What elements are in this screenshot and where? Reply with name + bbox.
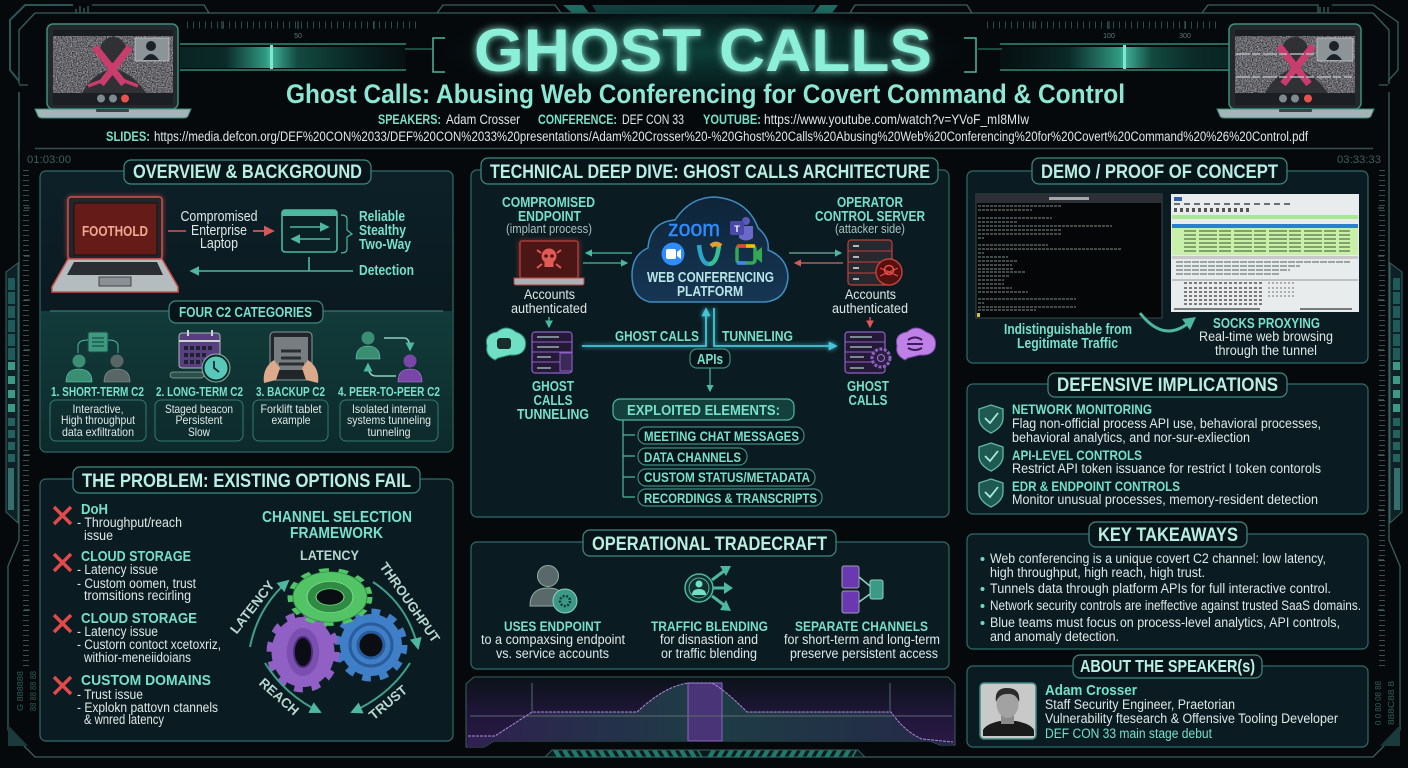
compromised endpoint: Accounts <box>524 287 575 302</box>
item: separate channels: SEPARATE CHANNELS <box>795 618 928 634</box>
talk metadata: CONFERENCE: <box>538 112 617 127</box>
heading: key takeaways: KEY TAKEAWAYS <box>1098 524 1238 546</box>
operator control server <box>815 195 925 327</box>
icon: teams <box>730 217 753 240</box>
category 1: short-term <box>50 332 146 441</box>
title: GHOST CALLS <box>474 17 932 84</box>
compromised endpoint: (implant process) <box>506 222 592 236</box>
heading: defensive implications: DEFENSIVE IMPLICATIONS <box>1057 374 1278 396</box>
category 3: backup: 3. BACKUP C2 <box>256 384 325 399</box>
left tunneling node <box>486 328 589 423</box>
speaker details: Adam Crosser <box>1045 682 1137 699</box>
category 4: peer-to-peer: tunneling <box>368 425 410 439</box>
panel: defensive implications <box>967 373 1368 514</box>
demo captions: through the tunnel <box>1215 343 1317 358</box>
panel: operational tradecraft <box>471 530 949 669</box>
heading: the problem: THE PROBLEM: EXISTING OPTIONS FAIL <box>82 470 411 492</box>
left ruler: 50 <box>294 33 302 40</box>
panel: technical deep dive <box>471 158 949 517</box>
demo captions: Legitimate Traffic <box>1017 336 1118 352</box>
talk metadata: https://www.youtube.com/watch?v=YVoF_mI8MIw <box>764 112 1029 127</box>
ghost calls / tunneling labels: GHOST CALLS <box>615 329 699 345</box>
item: uses endpoint <box>481 566 625 661</box>
option: cloud storage 2: CLOUD STORAGE <box>81 610 197 627</box>
category 2: long-term: Staged beacon <box>165 402 233 416</box>
category 1: short-term: Interactive, <box>72 402 124 416</box>
compromised laptop label and arrows <box>168 209 273 252</box>
tunnel flow arrows <box>582 308 837 391</box>
detection arrow: Detection <box>359 263 414 279</box>
speaker photo <box>980 683 1036 739</box>
left header bar <box>180 44 432 70</box>
right ruler: 100 <box>1103 33 1115 40</box>
item: traffic blending: for disnastion and <box>660 632 758 647</box>
takeaway text: Web conferencing is a unique covert C2 channel: low latency, <box>990 551 1326 566</box>
laptop: right glitched video call <box>1217 24 1374 118</box>
right ghost calls node <box>845 328 936 409</box>
compromised endpoint: ENDPOINT <box>518 209 581 225</box>
option: cloud storage 2: withior-meneiidoians <box>83 650 191 665</box>
left timestamp: 01:03:00 <box>27 154 71 166</box>
talk metadata <box>106 112 1308 144</box>
item: traffic blending: TRAFFIC BLENDING <box>651 618 768 634</box>
right side gauge: 0 0 80 08 88 <box>1374 680 1383 725</box>
right side gauge: 888C88 8 <box>1387 680 1396 725</box>
operator control server: (attacker side) <box>835 222 905 236</box>
heading: channel selection framework: FRAMEWORK <box>290 525 384 542</box>
heading: channel selection framework <box>262 509 412 542</box>
category 2: long-term: Persistent <box>176 413 223 427</box>
takeaway text: Tunnels data through platform APIs for full interactive control. <box>990 581 1331 596</box>
detection arrow <box>191 257 414 279</box>
category 1: short-term: data exfiltration <box>62 425 134 439</box>
option: cloud storage 2: - Custorn contoct xcetoxriz, <box>77 637 221 652</box>
compromised endpoint: COMPROMISED <box>502 195 595 211</box>
speaker details: Staff Security Engineer, Praetorian <box>1045 697 1235 712</box>
item: network monitoring: behavioral analytics, and nor-sur-exliection <box>1012 430 1250 445</box>
item: api-level controls: API-LEVEL CONTROLS <box>1012 447 1142 463</box>
wireshark screenshot <box>1171 194 1359 312</box>
left ruler <box>187 21 420 40</box>
item: separate channels <box>784 566 940 661</box>
icon: meet <box>737 246 762 263</box>
compromised endpoint <box>502 195 595 327</box>
left side gauge <box>6 170 38 746</box>
talk metadata: Adam Crosser <box>446 112 520 127</box>
right header bar <box>978 44 1230 70</box>
icon: two-way window <box>282 210 337 252</box>
traffic chart <box>466 677 955 747</box>
web conferencing platform cloud: WEB CONFERENCING <box>647 270 774 286</box>
item: uses endpoint: USES ENDPOINT <box>504 618 601 634</box>
heading: four c2 categories <box>169 301 323 323</box>
demo captions: Real-time web browsing <box>1199 329 1333 344</box>
properties brace: Two-Way <box>359 237 411 253</box>
takeaway text: Network security controls are ineffective against trusted SaaS domains. <box>990 598 1361 613</box>
right side gauge <box>1374 170 1402 746</box>
option: cloud storage 1: - Custom oomen, trust <box>77 576 196 591</box>
APIs pill <box>690 349 730 368</box>
item: edr and endpoint controls: EDR & ENDPOINT CONTROLS <box>1012 478 1180 494</box>
category 2: long-term: Slow <box>188 425 210 439</box>
heading: channel selection framework: CHANNEL SELECTION <box>262 509 412 526</box>
option: DoH: issue <box>84 528 113 543</box>
ghost calls / tunneling labels: TUNNELING <box>722 329 793 345</box>
category 1: short-term: High throughput <box>61 413 136 427</box>
talk metadata: DEF CON 33 <box>622 112 684 127</box>
option: custom domains: CUSTOM DOMAINS <box>81 672 211 689</box>
properties brace: Stealthy <box>359 223 406 239</box>
item: custom status: CUSTOM STATUS/METADATA <box>644 470 810 485</box>
compromised laptop label and arrows: Enterprise <box>191 223 247 239</box>
item: edr and endpoint controls: Monitor unusual processes, memory-resident detection <box>1012 492 1318 507</box>
panel: demo <box>967 158 1368 363</box>
demo captions <box>1004 316 1333 358</box>
category 4: peer-to-peer: 4. PEER-TO-PEER C2 <box>338 384 440 399</box>
panel: overview and background <box>40 160 453 452</box>
arrows: platform to server <box>789 253 843 263</box>
panel: the problem <box>40 467 453 741</box>
takeaway bullets <box>980 557 984 625</box>
category 1: short-term: 1. SHORT-TERM C2 <box>51 384 144 399</box>
category 3: backup <box>253 332 328 441</box>
left side gauge: G 888888 <box>16 670 25 711</box>
item: network monitoring: NETWORK MONITORING <box>1012 401 1152 417</box>
option: cloud storage 1: CLOUD STORAGE <box>81 548 191 565</box>
option: custom domains: - Trust issue <box>77 687 143 702</box>
compromised laptop label and arrows: Laptop <box>200 236 238 252</box>
icon: zoom camera <box>662 242 684 266</box>
demo captions: SOCKS PROXYING <box>1213 316 1320 332</box>
option: custom domains: - Explokn pattovn ctannels <box>77 700 218 715</box>
web conferencing platform cloud: zoom <box>668 216 720 241</box>
top status bar <box>563 5 838 13</box>
compromised endpoint: authenticated <box>511 301 587 316</box>
option: custom domains <box>77 672 218 727</box>
web conferencing platform cloud <box>632 197 788 302</box>
title brackets <box>433 38 976 72</box>
speaker details <box>1045 682 1338 741</box>
gears diagram: REACH <box>256 675 302 718</box>
option: DoH: - Throughput/reach <box>77 515 182 530</box>
option: cloud storage 2: - Latency issue <box>77 624 158 639</box>
exploited elements list: EXPLOITED ELEMENTS: <box>627 403 780 419</box>
header title glow <box>433 4 973 100</box>
category 3: backup: example <box>272 413 311 427</box>
speaker details: Vulnerability ftesearch & Offensive Tooling Developer <box>1045 711 1338 726</box>
gears diagram: TRUST <box>366 682 411 723</box>
operator control server: CONTROL SERVER <box>815 209 925 225</box>
bottom hash strip <box>545 750 865 757</box>
option: DoH <box>77 501 182 543</box>
panel: key takeaways <box>967 522 1368 649</box>
option: cloud storage 1: - Latency issue <box>77 562 158 577</box>
operator control server: authenticated <box>832 301 908 316</box>
item: uses endpoint: vs. service accounts <box>496 646 609 661</box>
option: cloud storage 2 <box>77 610 221 665</box>
item: edr and endpoint controls <box>979 478 1318 507</box>
exploited elements list <box>613 399 822 506</box>
item: uses endpoint: to a compaxsing endpoint <box>481 632 625 647</box>
left tunneling node: GHOST <box>532 379 574 395</box>
icon: foothold laptop <box>52 197 178 292</box>
right ruler: 300 <box>1179 33 1191 40</box>
gears diagram: THROUGHPUT <box>377 560 443 646</box>
talk metadata: YOUTUBE: <box>703 112 761 127</box>
category 2: long-term <box>155 330 243 441</box>
takeaway text: high throughput, high reach, high trust. <box>990 565 1205 580</box>
item: recordings: RECORDINGS & TRANSCRIPTS <box>644 491 817 506</box>
compromised laptop label and arrows: Compromised <box>180 209 258 225</box>
right ghost calls node: CALLS <box>848 393 888 409</box>
terminal screenshot <box>976 194 1162 318</box>
item: network monitoring <box>979 401 1321 445</box>
heading: about the speaker: ABOUT THE SPEAKER(s) <box>1080 656 1255 676</box>
subtitle: Ghost Calls: Abusing Web Conferencing for Covert Command & Control <box>286 79 1125 109</box>
left side gauge: 88 88 88 88 <box>29 670 38 711</box>
category 4: peer-to-peer: systems tunneling <box>347 413 431 427</box>
heading: demo: DEMO / PROOF OF CONCEPT <box>1041 161 1278 183</box>
talk metadata: SPEAKERS: <box>378 112 441 127</box>
panel: about the speaker <box>967 655 1368 747</box>
item: api-level controls: Restrict API token issuance for restrict I token contorols <box>1012 461 1321 476</box>
ghost calls / tunneling labels <box>615 329 793 345</box>
heading: four c2 categories: FOUR C2 CATEGORIES <box>179 305 312 321</box>
category 2: long-term: 2. LONG-TERM C2 <box>156 384 243 399</box>
arrow: terminal to proxy <box>1140 313 1192 331</box>
operator control server: Accounts <box>845 287 896 302</box>
option: cloud storage 1: tromsitions recirling <box>84 588 191 603</box>
option: custom domains: & wnred latency <box>84 712 164 727</box>
category 3: backup: Forklift tablet <box>260 402 322 416</box>
right timestamp: 03:33:33 <box>1337 154 1381 166</box>
web conferencing platform cloud: PLATFORM <box>677 284 743 300</box>
option: cloud storage 1 <box>77 548 196 603</box>
gears diagram: LATENCY <box>227 578 278 637</box>
item: api-level controls <box>979 443 1321 476</box>
category 4: peer-to-peer: Isolated internal <box>352 402 426 416</box>
right ghost calls node: GHOST <box>847 379 889 395</box>
heading: operational tradecraft: OPERATIONAL TRADECRAFT <box>592 533 827 555</box>
gears diagram <box>227 547 443 723</box>
item: traffic blending: or traffic blending <box>661 646 757 661</box>
takeaway text <box>990 551 1361 644</box>
operator control server: OPERATOR <box>837 195 903 211</box>
item: separate channels: for short-term and long-term <box>784 632 940 647</box>
icon: foothold laptop: FOOTHOLD <box>82 224 148 240</box>
properties brace: Reliable <box>359 209 405 225</box>
heading: overview: OVERVIEW & BACKGROUND <box>133 161 362 183</box>
takeaway text: and anomaly detection. <box>990 629 1119 644</box>
icon: webex <box>699 244 721 264</box>
failure icons <box>54 507 71 694</box>
category 4: peer-to-peer <box>338 332 440 441</box>
gears diagram: LATENCY <box>300 547 360 563</box>
talk metadata: SLIDES: <box>106 129 150 144</box>
left tunneling node: TUNNELING <box>517 407 589 423</box>
item: network monitoring: Flag non-official process API use, behavioral processes, <box>1012 416 1321 431</box>
icon: teams: T <box>734 224 740 234</box>
laptop: left glitched video call <box>35 24 191 118</box>
left tunneling node: CALLS <box>534 393 573 409</box>
properties brace <box>341 209 411 253</box>
takeaway text: Blue teams must focus on process-level analytics, API controls, <box>990 615 1340 630</box>
speaker details: DEF CON 33 main stage debut <box>1045 726 1212 741</box>
demo captions: Indistinguishable from <box>1004 322 1132 338</box>
item: separate channels: preserve persistent access <box>790 646 938 661</box>
item: traffic blending <box>651 566 768 661</box>
APIs pill: APIs <box>697 352 723 368</box>
right ruler <box>987 21 1220 40</box>
item: data channels: DATA CHANNELS <box>644 450 741 465</box>
arrows: endpoint to platform <box>583 253 632 263</box>
item: meeting chat messages: MEETING CHAT MESSAGES <box>644 429 799 444</box>
option: DoH: DoH <box>81 501 108 518</box>
arrowhead <box>1182 317 1196 330</box>
heading: technical deep dive: TECHNICAL DEEP DIVE: GHOST CALLS ARCHITECTURE <box>490 161 930 183</box>
